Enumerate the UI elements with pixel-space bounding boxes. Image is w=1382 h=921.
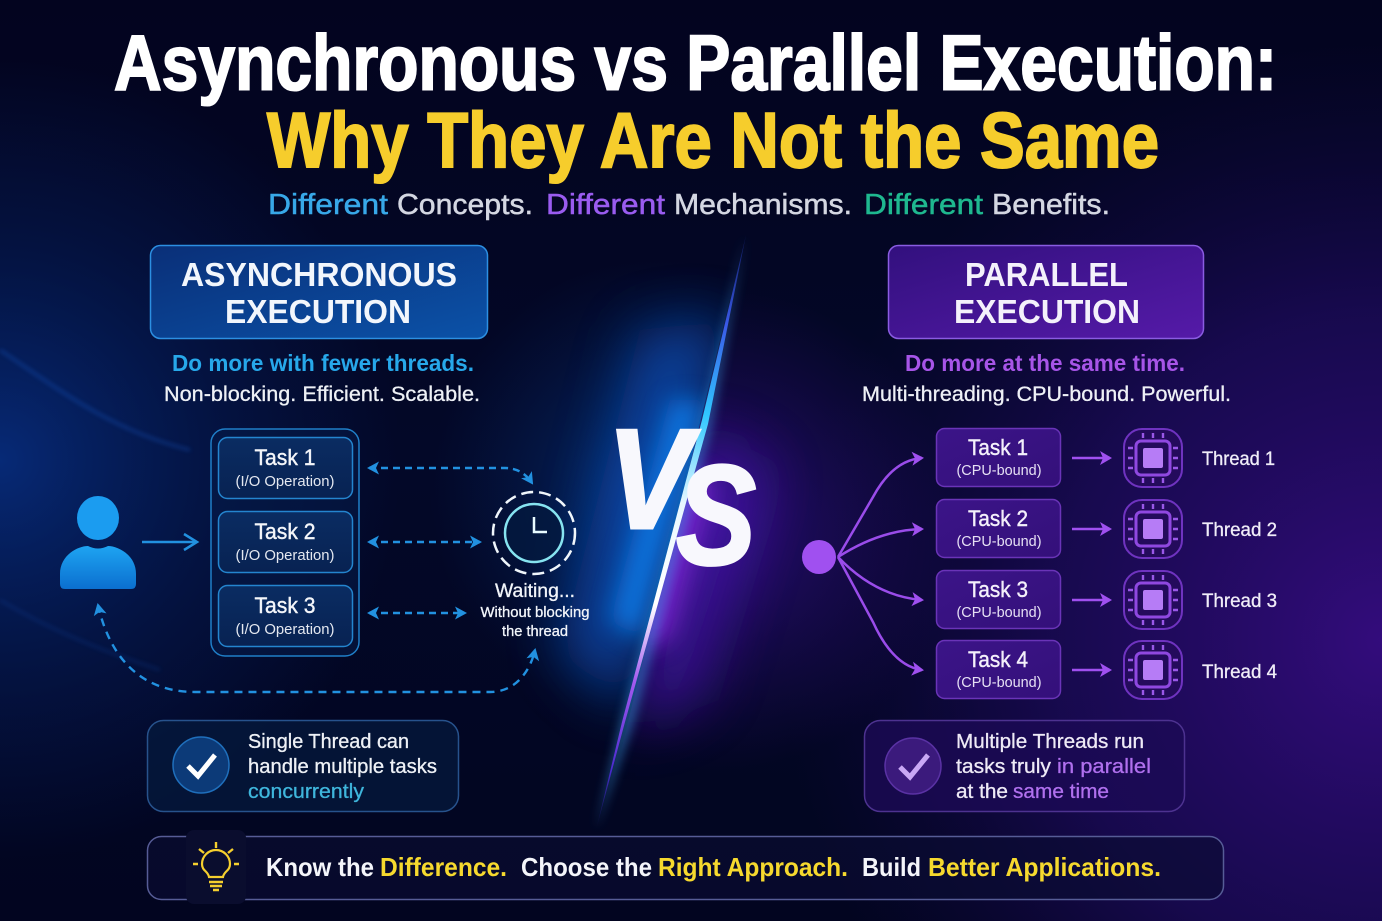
dashed arrows: tasks and waiting [369,468,532,613]
async task 3: Task 3 [254,593,316,618]
panel: asynchronous header: ASYNCHRONOUS [181,256,457,293]
icon: lightbulb [186,830,246,904]
parallel task 3: (CPU-bound) [956,605,1042,621]
bottom banner: Difference. [380,852,507,882]
parallel tagline [862,350,1231,406]
bottom banner: Choose the [521,852,652,882]
thread labels: Thread 2 [1202,519,1277,541]
async task 2: Task 2 [254,519,316,544]
parallel tagline: Do more at the same time. [905,350,1185,376]
waiting label: Waiting... [495,581,575,602]
parallel task 1 [936,428,1060,486]
panel: parallel header [888,246,1204,338]
parallel task 4: (CPU-bound) [956,675,1042,691]
panel: parallel header: PARALLEL [965,256,1128,293]
bottom banner [148,830,1224,904]
icon: thread 4 chip [1124,641,1182,699]
bottom banner: Better Applications. [928,852,1161,882]
parallel task 4 [936,640,1060,698]
subtitle: Different [546,189,665,221]
title: Why They Are Not the Same [267,96,1159,184]
parallel task 1: (CPU-bound) [956,463,1042,479]
arrow: user to tasks [142,534,197,550]
callout: parallel [864,720,1184,812]
parallel task 3 [936,570,1060,628]
panel: asynchronous header [150,246,488,338]
panel: parallel header: EXECUTION [954,293,1140,330]
parallel task 2 [936,500,1060,558]
callout: parallel: in parallel [1057,755,1151,778]
arrows: tasks to threads [1072,458,1110,670]
title [114,18,1277,184]
subtitle: Different [268,189,388,221]
thread labels: Thread 1 [1202,448,1275,470]
VS mark: V [607,400,700,559]
callout: async: concurrently [248,780,365,803]
parallel task 2: (CPU-bound) [956,534,1042,550]
icon: clock [493,492,575,574]
parallel tagline: Multi-threading. CPU-bound. Powerful. [862,383,1231,406]
bottom banner: Right Approach. [658,852,848,882]
subtitle [268,189,1110,221]
icon: thread 2 chip [1124,500,1182,558]
callout: parallel: tasks truly [956,755,1052,778]
bottom banner: Know the [266,852,374,882]
async tagline: Do more with fewer threads. [172,350,474,376]
async task 1: (I/O Operation) [236,474,334,490]
waiting label: the thread [502,624,568,640]
async task 1 [218,438,352,498]
parallel task 3: Task 3 [968,577,1028,602]
panel: asynchronous header: EXECUTION [225,293,411,330]
icon: thread 1 chip [1124,429,1182,487]
parallel task 4: Task 4 [968,647,1028,672]
VS mark [607,400,756,595]
callout: async: handle multiple tasks [248,755,437,778]
parallel task 2: Task 2 [968,506,1028,531]
callout: parallel: Multiple Threads run [956,730,1144,753]
panel: async task list [211,429,359,656]
bottom banner: Build [862,852,921,882]
callout: parallel: at the [956,780,1008,803]
thread labels: Thread 3 [1202,590,1277,612]
async task 3 [218,586,352,646]
icon: thread 3 chip [1124,571,1182,629]
thread labels [1202,448,1277,683]
parallel task 1: Task 1 [968,435,1028,460]
thread labels: Thread 4 [1202,661,1277,683]
async task 2: (I/O Operation) [236,548,334,564]
async tagline [164,350,480,406]
callout: parallel: same time [1013,780,1109,803]
async tagline: Non-blocking. Efficient. Scalable. [164,383,480,406]
callout: async [148,720,458,812]
icon: user [60,496,136,589]
VS mark: S [676,436,756,595]
async task 1: Task 1 [254,445,316,470]
subtitle: Different [864,189,983,221]
fan-out arrows from source node [802,458,922,670]
waiting label: Without blocking [480,605,590,621]
subtitle: Mechanisms. [674,189,852,221]
callout: async: Single Thread can [248,730,409,753]
subtitle: Benefits. [992,189,1110,221]
async task 3: (I/O Operation) [236,622,334,638]
divider beam [596,235,746,830]
dashed arrow: return loop [98,605,535,692]
subtitle: Concepts. [397,189,533,221]
waiting label [480,581,590,640]
async task 2 [218,512,352,572]
